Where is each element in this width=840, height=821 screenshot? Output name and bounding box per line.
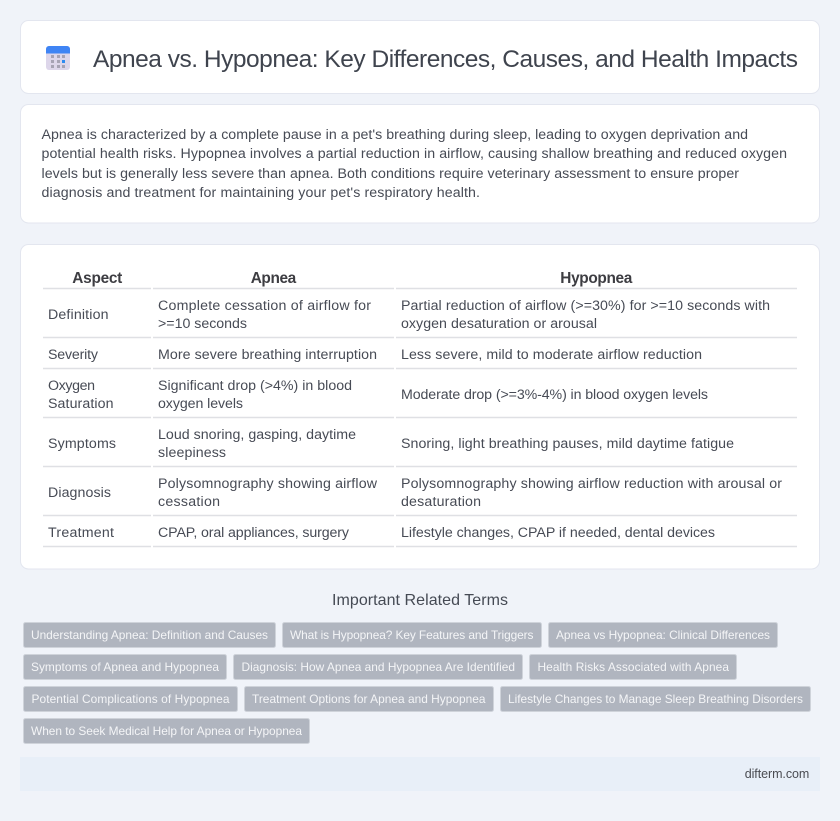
tag: When to Seek Medical Help for Apnea or Hypopnea [31,724,302,738]
row: severity: Severity [48,347,99,363]
related terms tags [24,622,810,744]
panel: comparison table [20,244,820,569]
intro paragraph: potential health risks. Hypopnea involves a partial reduction in airflow, causing shallow breathing and reduced oxygen [42,146,787,162]
row: oxygen saturation: Saturation [48,396,114,412]
panel: introduction [20,104,820,223]
row: definition: oxygen desaturation or arousal [401,316,597,332]
tag [24,718,310,744]
tag: Apnea vs Hypopnea: Clinical Differences [556,628,770,642]
row: definition: Complete cessation of airflow for [158,298,371,314]
row: treatment: CPAP, oral appliances, surgery [158,525,350,541]
heading: important related terms: Important Related Terms [332,592,508,609]
tag [548,622,778,648]
row: symptoms: sleepiness [158,445,226,461]
tag: Treatment Options for Apnea and Hypopnea [252,692,486,706]
table header row: Aspect [72,270,122,287]
tag [530,654,736,680]
row: oxygen saturation: Significant drop (>4%) in blood [158,378,352,394]
footer [20,757,820,791]
row: diagnosis: desaturation [401,494,481,510]
row: symptoms [48,427,734,461]
row: treatment [48,525,715,541]
tag: Potential Complications of Hypopnea [32,692,230,706]
row: diagnosis: Diagnosis [48,485,111,501]
row: severity [48,347,702,363]
panel: page header [20,20,820,94]
intro paragraph: diagnosis and treatment for maintaining your pet's respiratory health. [42,185,480,201]
footer source: difterm.com [745,767,809,781]
row: symptoms: Snoring, light breathing pauses, mild daytime fatigue [401,436,734,452]
row: oxygen saturation: Oxygen [48,378,95,394]
row: treatment: Treatment [48,525,114,541]
tag [244,686,494,712]
row: severity: Less severe, mild to moderate airflow reduction [401,347,702,363]
row: symptoms: Symptoms [48,436,116,452]
tag [282,622,542,648]
row: diagnosis: cessation [158,494,220,510]
row: diagnosis [48,476,782,510]
table header row: Apnea [251,270,297,287]
tag [234,654,522,680]
tag: Symptoms of Apnea and Hypopnea [31,660,219,674]
row: diagnosis: Polysomnography showing airflow reduction with arousal or [401,476,782,492]
tag: Understanding Apnea: Definition and Causes [31,628,268,642]
row: symptoms: Loud snoring, gasping, daytime [158,427,356,443]
tag: Diagnosis: How Apnea and Hypopnea Are Identified [242,660,515,674]
tag [24,654,226,680]
intro paragraph [42,127,787,201]
row: definition: >=10 seconds [158,316,247,332]
row: oxygen saturation: oxygen levels [158,396,243,412]
row: definition: Partial reduction of airflow (>=30%) for >=10 seconds with [401,298,770,314]
title: Apnea vs. Hypopnea: Key Differences, Causes, and Health Impacts [93,46,798,73]
row: definition: Definition [48,307,108,323]
intro paragraph: Apnea is characterized by a complete pause in a pet's breathing during sleep, leading to oxygen deprivation and [42,127,748,143]
tag [24,686,238,712]
table header row: Hypopnea [560,270,633,287]
row: oxygen saturation [48,378,708,412]
tag [500,686,810,712]
tag [24,622,276,648]
row: diagnosis: Polysomnography showing airflow [158,476,378,492]
table header row [72,270,633,287]
tag: What is Hypopnea? Key Features and Triggers [290,628,534,642]
icon: calendar [46,46,70,70]
row: treatment: Lifestyle changes, CPAP if needed, dental devices [401,525,715,541]
intro paragraph: levels but is generally less severe than apnea. Both conditions require veterinary assessment to ensure proper [42,166,739,182]
tag: Health Risks Associated with Apnea [538,660,729,674]
tag: Lifestyle Changes to Manage Sleep Breathing Disorders [508,692,803,706]
row: definition [48,298,770,332]
row: oxygen saturation: Moderate drop (>=3%-4%) in blood oxygen levels [401,387,708,403]
row: severity: More severe breathing interruption [158,347,377,363]
